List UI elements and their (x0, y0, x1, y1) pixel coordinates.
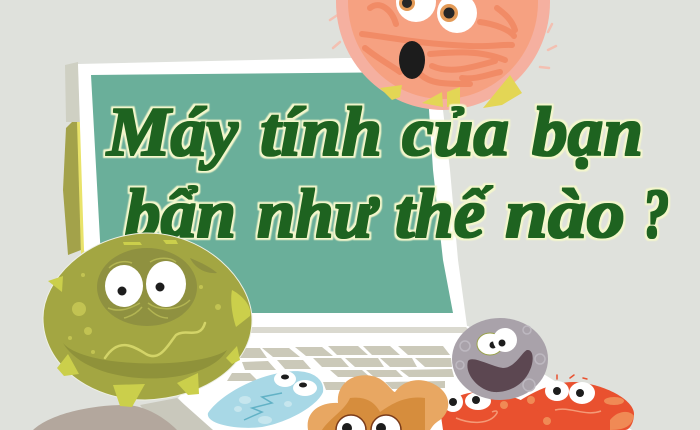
title: như (257, 176, 380, 253)
germ centre (322, 397, 425, 430)
right body (490, 382, 634, 430)
green germ with worried face (43, 233, 252, 407)
right eye (293, 380, 317, 396)
germ body (308, 375, 448, 430)
right eye 1 (545, 381, 569, 401)
dark eyelid mark (190, 258, 217, 273)
laptop lid side (63, 62, 86, 255)
title: nào (505, 176, 625, 253)
germ inner (348, 0, 538, 99)
title: bẩn (125, 176, 236, 253)
grey germ with open mouth (452, 318, 548, 400)
blue germ (208, 371, 323, 428)
squiggle marks (456, 326, 545, 391)
brown germ at bottom left (33, 405, 177, 430)
spots (68, 273, 221, 354)
right eye (146, 261, 186, 307)
laptop (63, 58, 632, 430)
left eye 2 (465, 392, 491, 410)
right eye (437, 0, 477, 33)
spots (500, 396, 634, 430)
germ body (336, 0, 550, 110)
right eye (371, 415, 401, 430)
germ body (452, 318, 548, 400)
left eye (274, 371, 296, 387)
title: Máy (106, 94, 239, 171)
left eye (105, 265, 143, 307)
zigzag mouth (244, 393, 282, 420)
right eye 2 (569, 382, 595, 404)
orange germ with surprised face (330, 0, 556, 110)
laptop base (140, 326, 632, 430)
germ crescent shade (63, 343, 227, 378)
red germ (441, 375, 634, 430)
hair dashes (557, 375, 587, 379)
title: của (402, 94, 509, 171)
yellow spikes (48, 240, 250, 407)
left body (441, 392, 550, 430)
right eye (493, 328, 517, 352)
left eye (396, 0, 436, 22)
wrinkles (108, 258, 190, 318)
laptop screen bezel (78, 58, 467, 326)
germ hairs (330, 12, 556, 68)
germ body (43, 233, 252, 400)
laptop screen (91, 72, 453, 313)
title: ? (643, 176, 669, 253)
yellow spikes (380, 75, 522, 108)
spots (234, 396, 292, 424)
title (106, 94, 669, 253)
wavy mouth (105, 323, 205, 358)
left eye (477, 333, 503, 355)
laptop keyboard (227, 346, 454, 390)
title: thế (395, 176, 493, 253)
open mouth (399, 41, 425, 79)
face shade (97, 248, 197, 326)
germ body (208, 371, 323, 428)
title: bạn (532, 94, 643, 171)
open mouth (467, 350, 533, 392)
germ markings (362, 5, 515, 84)
orange flower germ (308, 375, 448, 430)
title: tính (260, 94, 382, 171)
left eye 1 (443, 392, 463, 412)
mouth lines (456, 409, 601, 422)
left eye (336, 415, 366, 430)
